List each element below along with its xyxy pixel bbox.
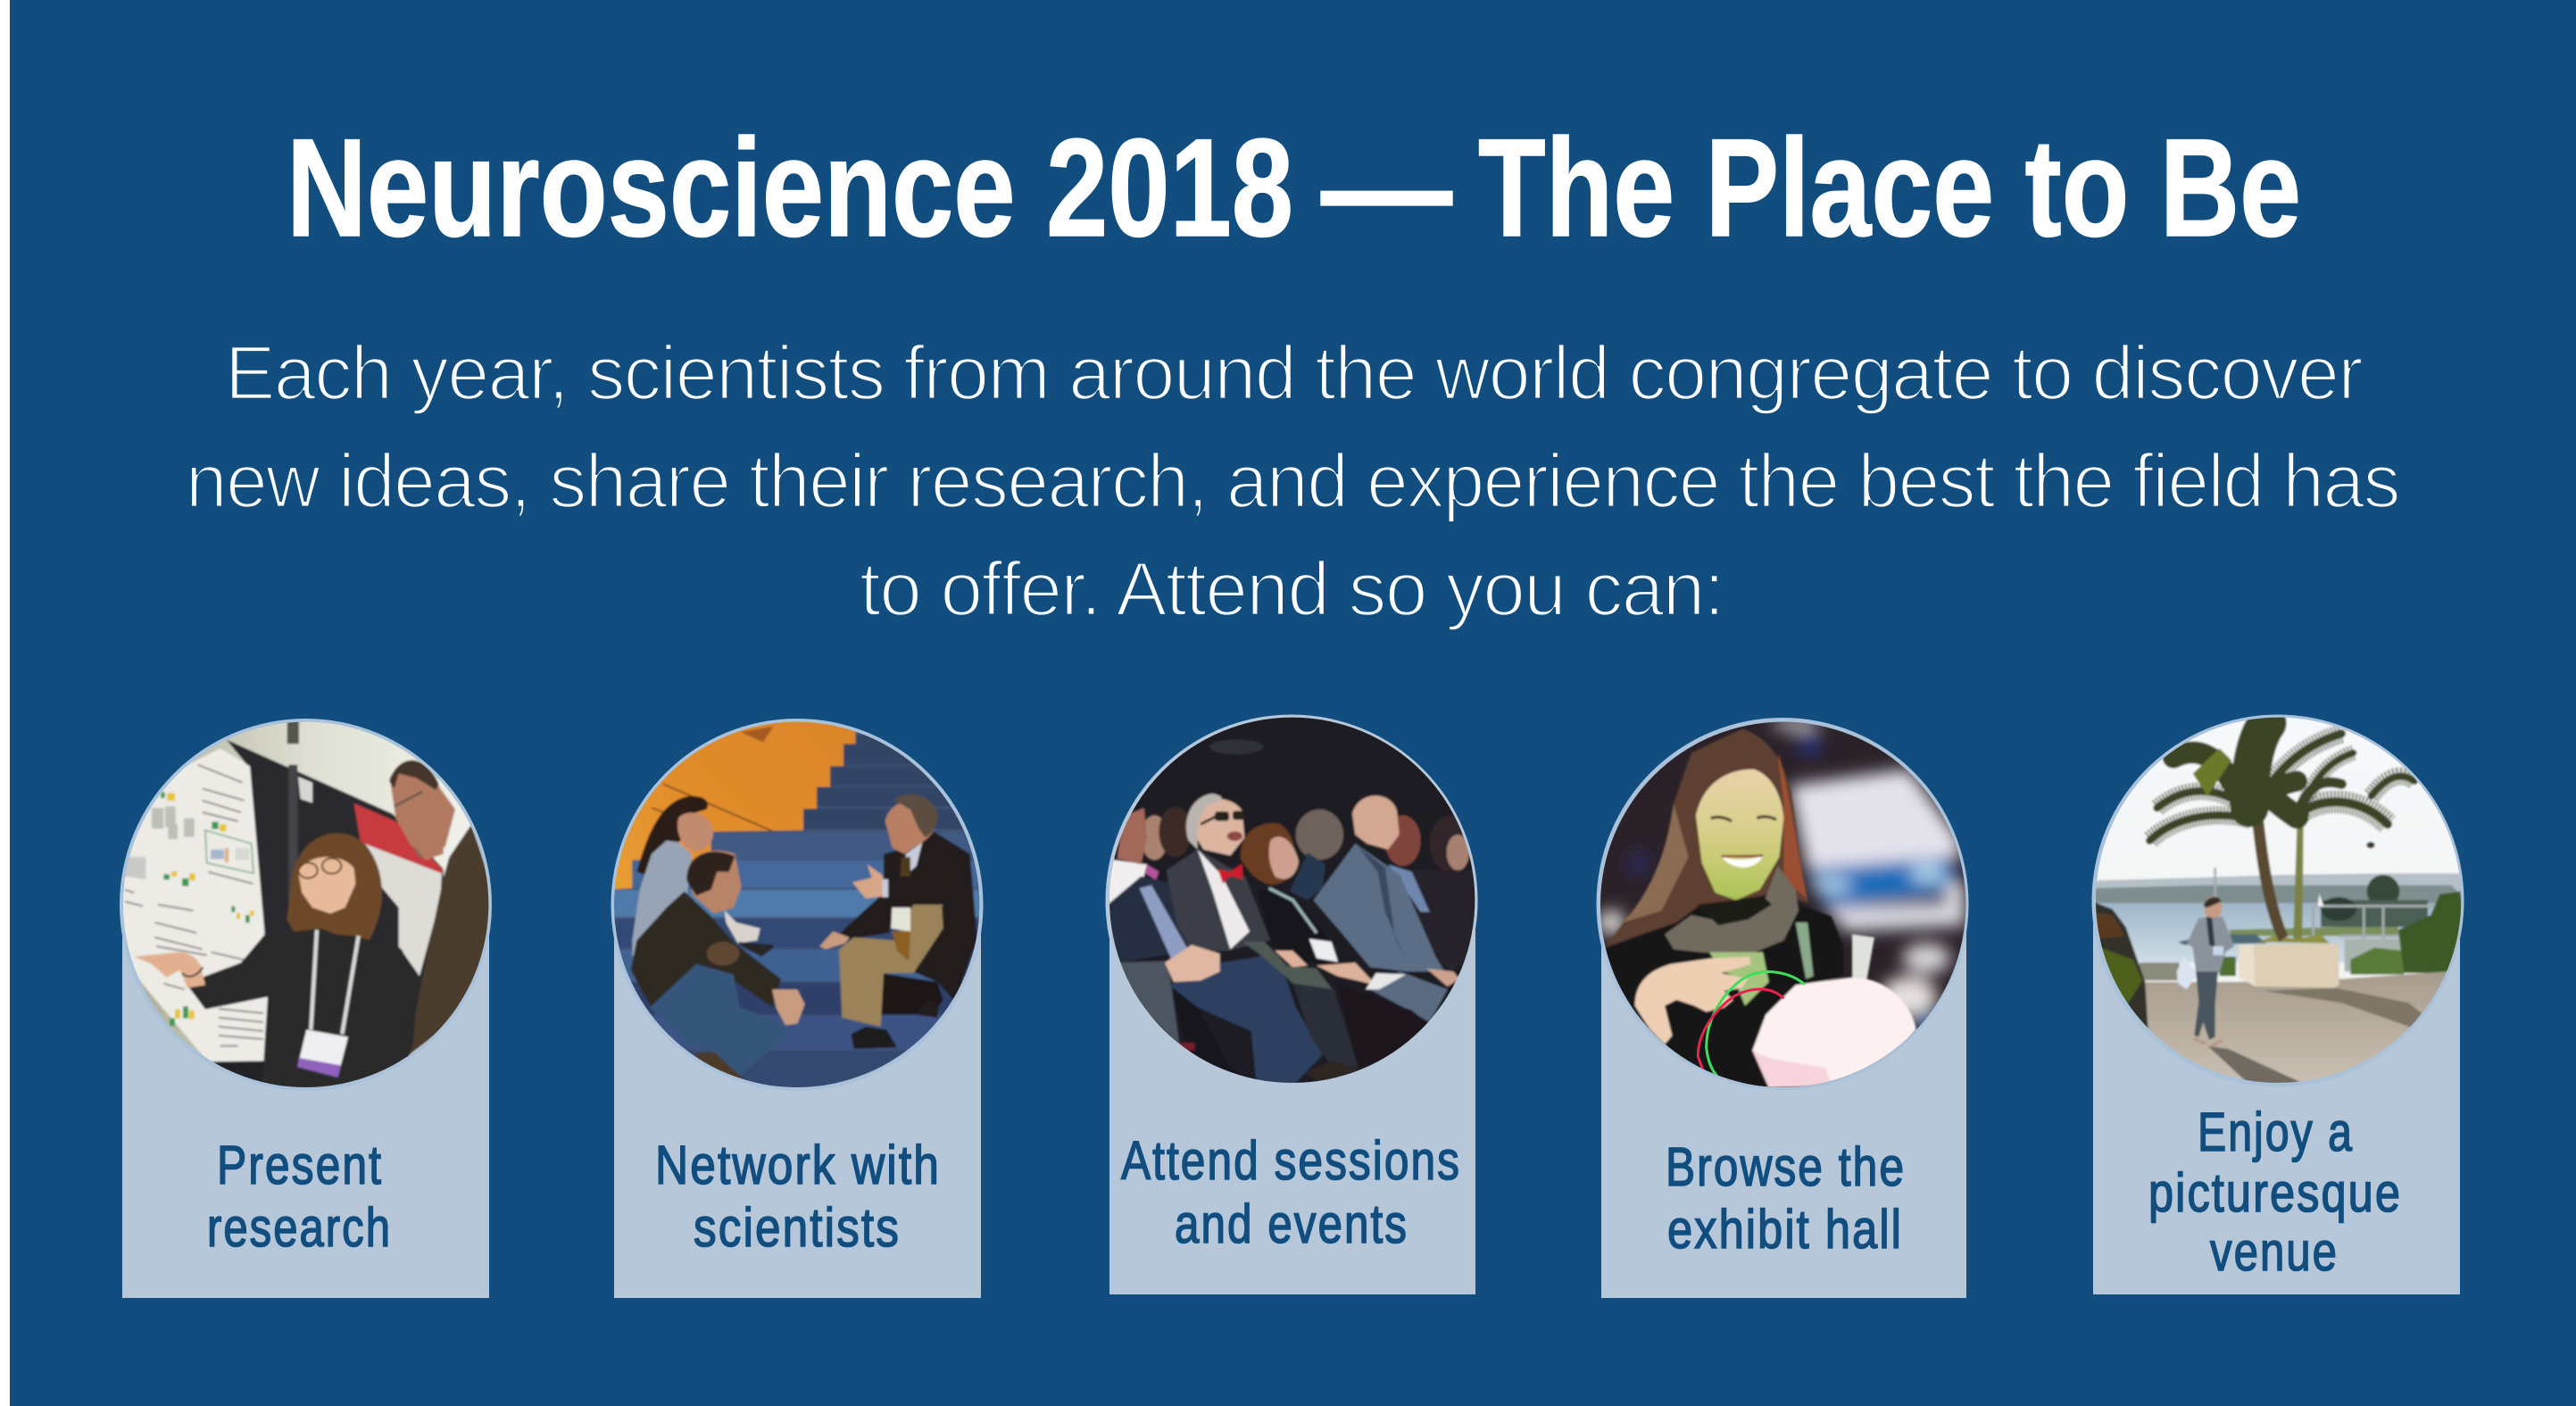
label: enjoy a picturesque venue	[2148, 1102, 2402, 1282]
coat	[1604, 904, 1843, 1094]
label: attend sessions and events: and events	[1175, 1194, 1408, 1254]
label: network with scientists: Network with	[655, 1135, 941, 1195]
card: network with scientists	[607, 714, 986, 1298]
card body	[1601, 904, 1966, 1298]
photo: palm trees and harbour venue	[2089, 710, 2468, 1089]
title: —	[1321, 111, 1452, 266]
label: present research: Present	[217, 1135, 383, 1195]
left man	[687, 851, 742, 913]
label: attend sessions and events	[1121, 1130, 1461, 1254]
photo ring	[1105, 714, 1478, 1087]
label: enjoy a picturesque venue: venue	[2210, 1221, 2339, 1282]
photo ring	[2092, 714, 2464, 1087]
label: attend sessions and events: Attend sessions	[1121, 1130, 1461, 1191]
card body	[2093, 901, 2460, 1294]
title	[287, 111, 2301, 266]
fence near left	[2140, 962, 2180, 980]
face	[1696, 770, 1783, 900]
left arm and suit	[1109, 858, 1148, 905]
fence	[2310, 903, 2436, 939]
label: browse the exhibit hall	[1666, 1136, 1906, 1260]
woman	[287, 833, 382, 944]
label: browse the exhibit hall: Browse the	[1666, 1136, 1906, 1197]
walking woman	[2204, 896, 2222, 919]
label: enjoy a picturesque venue: picturesque	[2148, 1162, 2402, 1223]
ground	[2089, 971, 2468, 1089]
hand	[1635, 957, 1751, 1044]
photo ring	[611, 719, 984, 1091]
card body	[1109, 901, 1475, 1294]
title: The Place to Be	[1478, 111, 2301, 266]
legs, lower row	[1292, 984, 1359, 1069]
man	[390, 763, 455, 860]
photo: scientists talking on stairs	[607, 714, 986, 1094]
elderly man	[1167, 850, 1270, 951]
glow rings	[1707, 972, 1805, 1077]
photo: woman with cotton candy in exhibit hall	[1593, 714, 1973, 1094]
label: network with scientists	[655, 1135, 941, 1258]
intro paragraph: Each year, scientists from around the world congregate to discover	[225, 331, 2362, 416]
card: present research	[116, 714, 495, 1298]
label: present research: research	[207, 1197, 392, 1258]
dark floor	[211, 1060, 266, 1082]
woman with red hair	[1241, 823, 1295, 885]
fronds: feathered outer leaflets	[2149, 734, 2414, 841]
trunks	[2252, 811, 2288, 942]
label: present research	[207, 1135, 392, 1258]
woman	[636, 796, 708, 875]
card: attend sessions and events	[1102, 710, 1482, 1294]
scarf	[1665, 866, 1799, 955]
card: enjoy a picturesque venue	[2089, 710, 2468, 1294]
intro paragraph: to offer. Attend so you can:	[860, 547, 1724, 632]
label: enjoy a picturesque venue: Enjoy a	[2198, 1102, 2354, 1162]
card body	[122, 904, 489, 1298]
title: Neuroscience 2018	[287, 111, 1293, 266]
cotton candy	[1752, 978, 1916, 1087]
fronds: solid cores	[2149, 723, 2414, 841]
photo: woman presenting a poster	[116, 714, 495, 1094]
card body	[614, 904, 981, 1298]
label: browse the exhibit hall: exhibit hall	[1667, 1199, 1903, 1260]
label: network with scientists: scientists	[694, 1197, 901, 1258]
right man	[833, 832, 977, 1002]
card: browse the exhibit hall	[1593, 714, 1973, 1298]
mast	[2214, 868, 2216, 897]
photo ring	[1596, 718, 1969, 1090]
bald man	[1314, 844, 1444, 971]
trees	[2367, 875, 2399, 908]
paper	[1852, 935, 1874, 979]
back row heads	[1141, 815, 1168, 860]
intro paragraph: new ideas, share their research, and experience the best the field has	[186, 439, 2399, 524]
photo: audience watching a session	[1102, 710, 1482, 1089]
blurred passer-by	[2089, 900, 2148, 1031]
bushes	[2398, 891, 2468, 973]
hills	[2096, 872, 2462, 897]
planter	[2239, 944, 2339, 988]
red poster	[354, 803, 444, 873]
hair	[1605, 729, 1809, 946]
photo ring	[120, 719, 492, 1091]
intro paragraph	[186, 331, 2399, 632]
